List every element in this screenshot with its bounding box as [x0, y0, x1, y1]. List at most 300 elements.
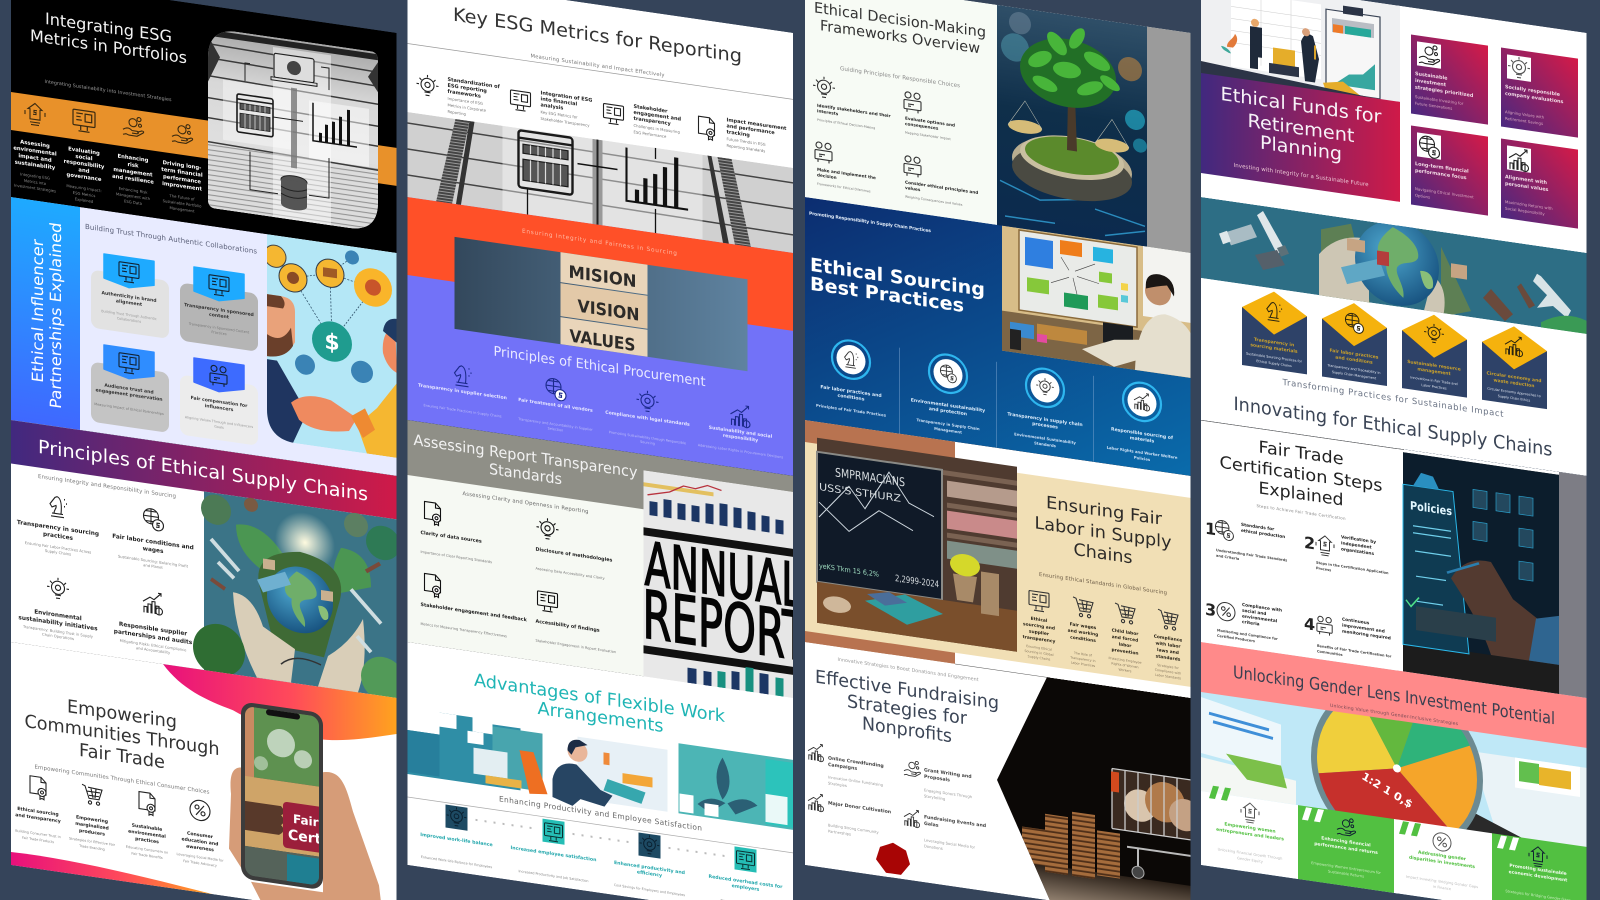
items text: Assessing: [20, 139, 50, 150]
item: environmental: [18, 578, 98, 640]
card: socially responsible: Aligning Values with: [1505, 109, 1544, 120]
title: [1220, 84, 1382, 171]
title: Unlocking Gender Lens Investment Potential: [1233, 663, 1555, 729]
item: clarity: Clarity of data sources: [421, 530, 482, 545]
title: Principles of Ethical Procurement: [494, 344, 706, 390]
items subtext: [14, 172, 202, 213]
item: options: [904, 91, 955, 142]
card: alignment: Alignment with: [1505, 174, 1547, 186]
items text: Driving long-: [163, 160, 201, 172]
item: environmental: Chain Operations: [42, 633, 74, 641]
card: long-term: Navigating Ethical Investment: [1415, 186, 1474, 200]
icon: report: [73, 109, 95, 133]
card: authenticity: Authenticity in brand: [101, 291, 157, 304]
item: fair wages: conditions: [1070, 634, 1096, 644]
item: decision: decision: [817, 172, 837, 180]
item: step 2: Verification by: [1341, 535, 1376, 545]
item: step 3: Certified Producers: [1217, 634, 1255, 643]
item: environmental: Transparency: Building Trust in Supply: [23, 625, 93, 639]
item: responsible supplier: Mitigating Risks: Ethical Compliance: [120, 639, 186, 652]
image: planning whiteboard and man: [1002, 226, 1191, 378]
panel: Key ESG Metrics for Reporting: [408, 0, 794, 259]
item: ethical sourcing: Supply Chains: [1028, 654, 1051, 662]
title: Assessing Report Transparency: [413, 431, 638, 481]
image: mission vision values blocks: MISION: [568, 262, 636, 292]
card: economic development: [1492, 833, 1587, 900]
item: ethical sourcing: Ensuring Ethical: [1026, 644, 1052, 652]
item: stakeholder: [604, 99, 681, 141]
item: child labor: Rights of Women: [1111, 661, 1139, 669]
item: standardization: [416, 72, 501, 121]
image: data flow over building: [208, 28, 378, 242]
item: marginalized producers: Empowering: [76, 815, 108, 825]
item: work-life: Improved work-life balance: [420, 832, 493, 848]
item: environmental practices: environmental: [128, 829, 166, 840]
card: financial performance: Enhancing financial: [1321, 836, 1371, 849]
panel: Principles of Ethical Supply Chains: [11, 420, 405, 704]
item: step 1: [1205, 517, 1287, 568]
item: ethical sourcing: sourcing and: [1023, 621, 1055, 632]
item: environmental: sustainability initiatives: [18, 615, 98, 633]
item: stakeholder: Stakeholder engagement and feedback: [421, 602, 528, 623]
card: audience trust: [91, 343, 169, 433]
card: alignment: Maximizing Returns with: [1505, 199, 1553, 211]
title: Chains: [1074, 540, 1133, 568]
image: glowing policies clipboard: Policies: [1410, 498, 1452, 518]
item: marginalized producers: marginalized: [75, 821, 109, 832]
item: step 2: organizations: [1341, 546, 1374, 557]
icon: hand coins: [172, 122, 193, 144]
item: standardization: Standardization of: [448, 77, 500, 90]
item: options: consequences: [905, 121, 939, 131]
card: audience trust: Audience trust and: [104, 384, 154, 396]
item: sustainability: Addressing Labor Rights in Procurement Decisions: [698, 443, 783, 459]
panel: Ethical Influencer Partnerships Explained: [11, 197, 397, 476]
item: step 4: monitoring required: [1342, 628, 1391, 642]
title: [32, 12, 186, 64]
item: integration: Stakeholder Transparency: [540, 116, 590, 128]
item: responsible sourcing: materials: [1130, 435, 1154, 445]
card: sustainable resources: Labor Practices: [1421, 383, 1447, 391]
item: standardization: Importance of ESG: [448, 96, 483, 106]
item: impact: Impact measurement: [726, 117, 786, 132]
card: financial performance: Empowering Women Entrepreneurs for: [1311, 861, 1381, 875]
title: Frameworks Overview: [820, 17, 980, 57]
item: fair labor: Principles of Fair Trade Practices: [816, 403, 887, 418]
item: transparency: processes: [1032, 421, 1058, 431]
item: clarity: Importance of Clear Reporting Standards: [421, 550, 492, 564]
image: influencer handshake network: $: [324, 329, 340, 357]
image: hand holding phone: Cert: [288, 827, 322, 848]
item: overhead: [708, 843, 783, 900]
item: child labor: [1109, 602, 1142, 675]
subtitle: Ensuring Ethical Standards in Global Sourcing: [1039, 572, 1167, 596]
item: transparency: Transparency in supply chain: [1007, 412, 1083, 428]
grey strip: [1559, 472, 1587, 699]
column 2 of slides: [408, 0, 808, 900]
column 1 of slides: [11, 0, 405, 900]
item: grant writing: Engaging Donors Through: [924, 788, 972, 799]
item: stakeholder: [420, 573, 528, 641]
item: supplier selection: [418, 360, 507, 419]
item: productivity: efficiency: [637, 869, 662, 879]
item: environmental: Transparency in Supply Chain: [916, 417, 980, 431]
item: ethical sourcing: Ethical: [1031, 617, 1047, 624]
item: fair labor: Fair labor conditions and: [112, 534, 194, 551]
title: Standards: [489, 460, 562, 488]
title: Advantages of Flexible Work: [474, 671, 726, 727]
item: options: Mapping Stakeholder Impact: [905, 131, 952, 141]
item: responsible supplier: partnerships and audits: [114, 629, 193, 646]
item: standardization: Metrics in Corporate: [448, 102, 487, 113]
image: annual report: ANNUAL: [644, 530, 803, 622]
card: circular economy: [1482, 322, 1547, 409]
image: data icons over building: [408, 107, 794, 259]
item: step 3: Compliance with: [1242, 603, 1282, 614]
subtitle: Unlocking Value through Gender-Inclusive Strategies: [1330, 703, 1459, 727]
item: stakeholders: Principles of Ethical Decision-Making: [817, 118, 875, 130]
item: productivity: Cost Savings for Employers and Employees: [614, 883, 685, 897]
card: economic development: economic development: [1509, 869, 1568, 884]
items subtext: The Future of: [169, 193, 195, 202]
item: major donor: Partnerships: [828, 829, 851, 837]
items subtext: Sustainable Portfolio: [163, 198, 202, 209]
item: fair labor: [112, 508, 194, 569]
item: environmental: Environmental sustainability: [911, 398, 985, 414]
item: grant writing: [904, 760, 973, 805]
column 4 of slides: [1201, 0, 1587, 900]
item: marginalized producers: Strategies for Effective Fair: [69, 836, 115, 847]
card: authenticity: Building Trust Through Authentic: [101, 309, 157, 321]
title: Nonprofits: [862, 713, 952, 747]
card: fair compensation: Goals: [214, 424, 224, 430]
grey strip: [1147, 27, 1191, 256]
item: standardization: ESG reporting: [448, 83, 487, 95]
item: events: Donations: [924, 844, 943, 851]
column 3 of slides: [805, 0, 1201, 900]
item: transparency: [16, 496, 99, 556]
item: stakeholder: ESG Performance: [634, 129, 667, 139]
card: gender disparities: disparities in investments: [1409, 855, 1475, 870]
item: transparency: practices: [43, 532, 73, 542]
header band: [1201, 642, 1587, 748]
item: responsible sourcing: Labor Rights and Worker Welfare: [1107, 445, 1177, 460]
left title band: [11, 197, 80, 430]
panel: Empowering Communities Through Fair Trade: [11, 642, 397, 900]
card: financial performance: Sustainable Returns: [1328, 869, 1364, 879]
item: ethical sourcing: transparency: [1023, 634, 1055, 645]
card: circular economy: waste reduction: [1494, 377, 1534, 389]
item: fair wages: The Role of: [1074, 651, 1092, 658]
item: standardization: Reporting: [448, 109, 466, 117]
title: Key ESG Metrics for Reporting: [453, 5, 742, 67]
card: transparency: sourcing materials: [1250, 342, 1298, 355]
items text: [14, 140, 202, 191]
item: major donor: [808, 793, 891, 842]
item: fair treatment: Fair treatment of all vendors: [518, 397, 593, 414]
title: Fair Trade: [1259, 436, 1344, 469]
item: step 4: Benefits of Fair Trade Certification for: [1317, 644, 1391, 659]
card: gender disparities: Addressing gender: [1418, 850, 1466, 862]
item: compliance: Strategies for: [1157, 663, 1179, 670]
item: marginalized producers: Trade Branding: [78, 844, 105, 852]
item: ethical sourcing: Building Consumer Trust in: [15, 829, 61, 839]
item: environmental practices: Educating Consumers on: [126, 845, 168, 855]
item: crowdfunding: [808, 743, 884, 793]
image: globe with logistics: [1201, 193, 1587, 338]
title: Fair Trade: [79, 740, 165, 773]
card: audience trust: Measuring Impact of Ethical Partnerships: [94, 402, 164, 416]
item: step 4: 4: [1304, 614, 1315, 635]
items text: Evaluating: [68, 146, 100, 157]
subtitle: Innovative Strategies to Boost Donations and Engagement: [838, 657, 979, 683]
card: empowering women: [1201, 784, 1298, 879]
items subtext: Management with: [116, 191, 151, 201]
items text: term financial: [161, 167, 203, 179]
item: fair wages: Labor Practices: [1071, 661, 1096, 668]
card: alignment: personal values: [1505, 181, 1549, 193]
item: compliance: Promoting Sustainability through Responsible: [609, 430, 686, 445]
item: consumer education: Leveraging Social Media for: [177, 852, 223, 863]
item: fair labor: wages: [143, 546, 164, 555]
item: consumer education: Fair Trade Advocacy: [183, 859, 217, 868]
items subtext: ESG Metrics: [73, 190, 95, 198]
item: accessibility: Stakeholder Engagement in Report Evaluation: [536, 639, 616, 654]
panel: Innovating for Ethical Supply Chains: [1201, 193, 1587, 476]
item: compliance: laws and: [1157, 647, 1179, 656]
item: step 4: Continuous: [1342, 617, 1369, 626]
item: ethical sourcing: [15, 774, 61, 845]
item: stakeholders: interests: [817, 108, 839, 116]
item: events: Fundraising Events and: [924, 815, 986, 829]
item: integration: analysis: [540, 102, 563, 112]
vertical title: Ethical Influencer: [29, 238, 47, 384]
image: chalkboard on desk: SMPRMACIANS: [835, 465, 905, 489]
item: compliance: standards: [1156, 653, 1181, 663]
image: hand holding phone: [229, 700, 383, 900]
title: Empowering: [67, 696, 177, 733]
items text: impact and: [18, 153, 52, 164]
card: socially responsible: Retirement Savings: [1505, 116, 1543, 126]
item: accessibility: Accessibility of findings: [536, 619, 600, 634]
item: environmental: [911, 349, 985, 438]
item: step 2: 2: [1304, 533, 1315, 554]
item: environmental: Environmental: [34, 609, 82, 622]
item: employee satisfaction: Increased employee satisfaction: [511, 845, 596, 863]
item: principles: [904, 155, 978, 209]
panel: Assessing Report Transparency Standards: [408, 420, 808, 701]
image: glowing policies clipboard: [1403, 452, 1559, 695]
image: tree on coin with scales: [997, 5, 1147, 250]
panel: Ethical Decision-Making Frameworks Overview: [805, 0, 1191, 256]
item: environmental practices: practices: [135, 836, 159, 845]
title: Arrangements: [538, 699, 664, 737]
dotted connector: [572, 834, 632, 843]
image: annual report: [642, 470, 808, 701]
item: responsible sourcing: Responsible sourcing of: [1111, 427, 1173, 441]
item: fair labor: [816, 336, 887, 418]
title: [815, 667, 999, 754]
card: fair compensation: [180, 356, 258, 446]
title: [810, 255, 985, 320]
subtitle: Empowering Communities Through Ethical Consumer Choices: [35, 764, 210, 796]
item: marginalized producers: [69, 782, 116, 853]
subtitle: Ensuring Integrity and Responsibility in Sourcing: [38, 474, 176, 500]
item: major donor: Major Donor Cultivation: [828, 800, 891, 815]
card: empowering women: Unlocking Financial Growth Through: [1218, 847, 1282, 861]
title: Ensuring Fair: [1046, 493, 1163, 530]
card: fair compensation: Aligning Values Through and Influencers: [185, 415, 253, 429]
item: fair labor: Fair labor practices and: [820, 385, 882, 399]
item: step 3: criteria: [1242, 619, 1260, 628]
item: employee satisfaction: Increased Productivity and Job Satisfaction: [518, 869, 589, 883]
item: compliance: Compliance: [1154, 635, 1182, 644]
image: hand holding phone: Fair: [293, 812, 319, 830]
items text: and: [78, 167, 90, 175]
card: sustainable resources: Sustainable resource: [1407, 360, 1461, 373]
item: step 2: [1304, 529, 1389, 581]
item: step 1: 1: [1205, 519, 1216, 539]
card: empowering women: Empowering women: [1224, 822, 1276, 835]
item: crowdfunding: Innovative Online Fundraising: [828, 775, 883, 787]
items text: Enhancing: [118, 153, 148, 164]
item: compliance: with labor: [1155, 640, 1181, 650]
item: sustainability: Sustainability and social: [709, 426, 772, 440]
item: standardization: frameworks: [448, 89, 481, 100]
item: step 1: and Criteria: [1216, 554, 1240, 561]
card: audience trust: engagement preservation: [95, 387, 163, 403]
items text: performance: [163, 174, 201, 186]
item: step 3: environmental: [1242, 613, 1278, 625]
item: transparency: [1007, 363, 1083, 452]
title: Integrating ESG: [45, 9, 172, 46]
items text: responsibility: [64, 159, 105, 171]
divider: [11, 642, 204, 670]
panel: Ethical Funds for Retirement Planning: [1201, 0, 1587, 256]
content area: [408, 475, 644, 677]
items text: improvement: [162, 181, 202, 193]
card: sustainable investment: investment: [1415, 78, 1447, 88]
item: step 2: Process: [1316, 566, 1331, 572]
items subtext: Investment Strategies: [14, 182, 56, 194]
item: fair treatment: Selection: [548, 426, 563, 433]
title: Best Practices: [810, 274, 964, 317]
item: events: Leveraging Social Media for: [924, 838, 975, 850]
item: transparency: Ensuring Fair Labor Practices Across: [25, 541, 91, 555]
dotted connector: [668, 848, 728, 857]
item: environmental practices: Sustainable: [132, 824, 162, 833]
items text: environmental: [13, 145, 57, 158]
card: sustainable resources: management: [1417, 366, 1451, 377]
title: Certification Steps: [1220, 452, 1382, 495]
item: stakeholders: [813, 75, 891, 133]
item: clarity: [420, 501, 492, 564]
beige band: [805, 442, 1191, 687]
item: step 1: ethical production: [1241, 528, 1285, 540]
card: long-term: performance focus: [1415, 168, 1467, 181]
item: ethical sourcing: Sourcing in Global: [1024, 649, 1054, 657]
card: transparency: Transparency in: [1254, 338, 1294, 348]
item: accessibility: [536, 591, 616, 654]
item: compliance: [1154, 609, 1182, 681]
items subtext: Explained: [75, 196, 94, 204]
card: transparency: content: [209, 312, 230, 321]
item: decision: Make and implement the: [817, 167, 876, 180]
card: circular economy: Supply Chain Ethics: [1498, 394, 1531, 403]
subtitle: Transforming Practices for Sustainable Impact: [1282, 378, 1504, 420]
item: options: Evaluate options and: [905, 116, 955, 128]
item: disclosure: Assessing Data Accessibility and Clarity: [536, 567, 605, 581]
items text: governance: [67, 172, 102, 183]
item: principles: values: [905, 185, 921, 192]
item: integration: Key ESG Metrics for: [540, 109, 578, 120]
card: fair labor: Supply Chain Management: [1332, 370, 1377, 380]
image: coins and shopping cart: [995, 670, 1201, 900]
image: mission vision values blocks: VISION: [578, 297, 639, 326]
item: child labor: and forced: [1112, 634, 1138, 644]
title: Labor in Supply: [1035, 513, 1172, 553]
items text: and resilience: [112, 174, 154, 186]
item: integration: Integration of ESG: [540, 90, 592, 104]
item: step 3: social and: [1242, 608, 1266, 617]
title: Ethical Funds for: [1221, 84, 1382, 128]
item: impact: Reporting Standards: [726, 143, 765, 153]
card: sustainable resources: Innovations in Fair Trade and: [1410, 375, 1458, 386]
item: employee satisfaction: [511, 814, 596, 884]
image: chalkboard on desk: USS'S STHURZ: [819, 482, 901, 505]
subtitle: Measuring Sustainability and Impact Effectively: [531, 53, 664, 79]
items subtext: Measuring Impact:: [66, 183, 102, 193]
item: fair labor: Sustainable Sourcing: Balancing Profit: [118, 555, 188, 569]
card: alignment: [1501, 138, 1578, 229]
item: sustainability: responsibility: [723, 433, 758, 444]
card: circular economy: Circular economy and: [1487, 371, 1541, 384]
card: fair labor: Fair labor practices: [1329, 349, 1379, 361]
image: chalkboard on desk: [817, 438, 1017, 652]
item: environmental practices: [126, 790, 168, 861]
item: step 4: Communities: [1317, 649, 1343, 657]
item: impact: and performance: [726, 123, 775, 136]
title: Ethical Decision-Making: [814, 0, 986, 41]
card: sustainable investment: Future Generations: [1415, 101, 1452, 111]
item: responsible supplier: and Accountability: [136, 646, 171, 655]
card: transparency: Sustainable Sourcing Practices for: [1246, 352, 1302, 364]
item: work-life: [420, 801, 493, 869]
item: crowdfunding: Online Crowdfunding: [828, 756, 884, 769]
item: child labor: labor: [1119, 641, 1132, 649]
image: magnifier with pie chart: 1:2 1 0,$: [1360, 770, 1415, 811]
item: child labor: prevention: [1112, 647, 1138, 657]
dotted connector: [476, 820, 536, 829]
item: environmental practices: Fair Trade Benefits: [131, 851, 163, 860]
items subtext: Enhancing Risk: [119, 186, 147, 195]
item: step 2: independent: [1341, 540, 1372, 551]
item: productivity: [614, 829, 685, 897]
dividers: [900, 348, 1094, 462]
icon: house coin: [25, 102, 45, 126]
item: child labor: Child labor: [1112, 628, 1138, 637]
item: transparency: Environmental Sustainability: [1014, 431, 1076, 445]
item: sustainability: [698, 399, 783, 459]
card: transparency: [1242, 287, 1307, 374]
card: sustainable investment: Sustainable: [1415, 71, 1447, 82]
title: [1220, 431, 1382, 515]
item: crowdfunding: Strategies: [828, 781, 847, 788]
panel: Effective Fundraising Strategies for Nonprofits: [805, 642, 1201, 900]
top label: Promoting Responsibility in Supply Chain Practices: [809, 211, 931, 234]
item: child labor: Workers: [1119, 667, 1132, 673]
image: remote worker illustration: [408, 704, 794, 838]
